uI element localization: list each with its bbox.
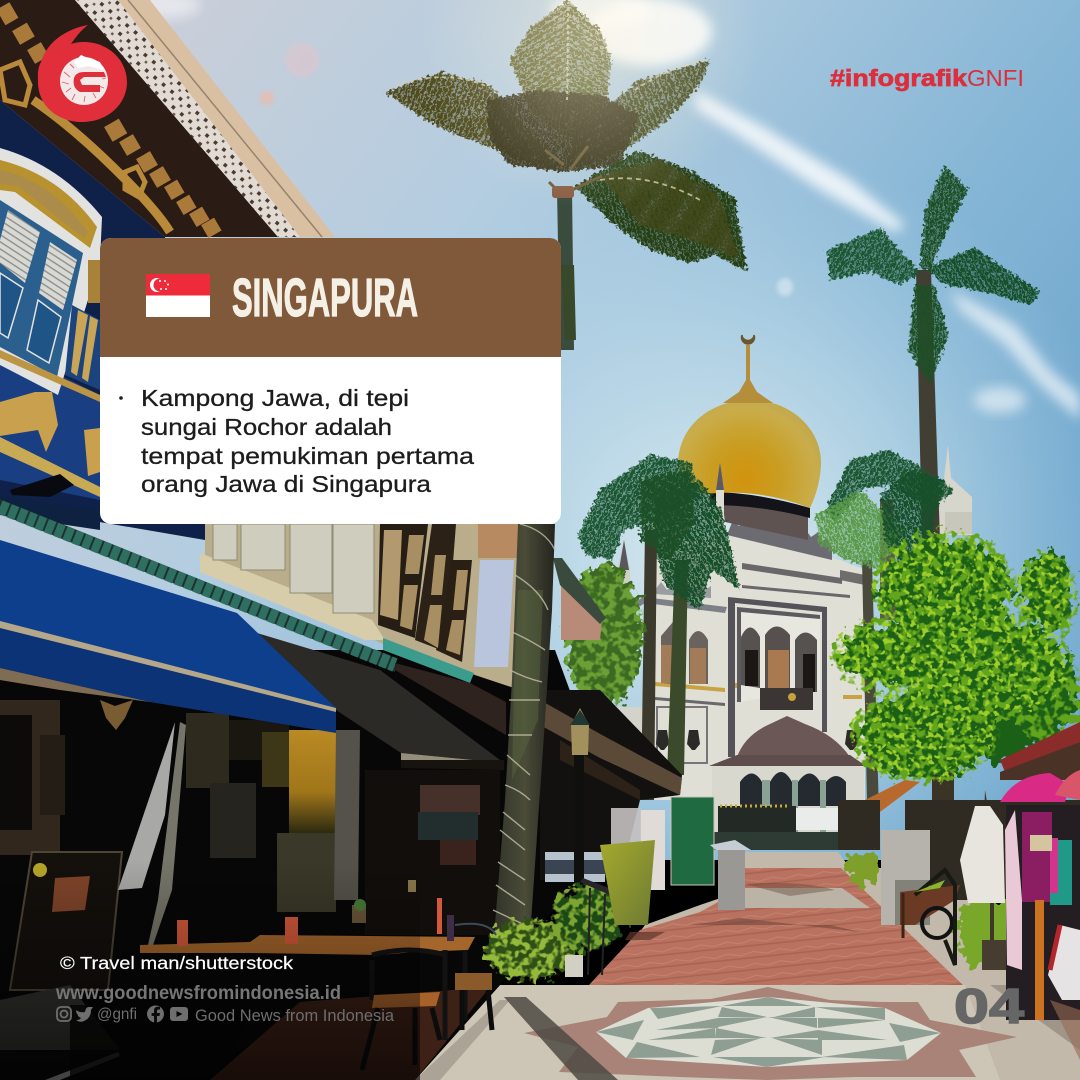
clothes rack xyxy=(1005,805,1080,1020)
social media row xyxy=(57,1006,395,1025)
page number: 04 xyxy=(954,980,1024,1034)
olive planter xyxy=(600,840,655,925)
lower vignette for caption legibility xyxy=(0,860,420,1080)
slim spire by dome xyxy=(716,462,724,535)
body text xyxy=(141,385,475,497)
body text: Kampong Jawa, di tepi xyxy=(141,385,409,411)
palm shadow on paving xyxy=(504,997,618,1080)
black awning xyxy=(257,633,504,763)
bullet xyxy=(119,396,123,400)
right shop row with awnings xyxy=(540,690,682,890)
facebook page name: Good News from Indonesia xyxy=(195,1007,395,1025)
body text: tempat pemukiman pertama xyxy=(141,443,475,469)
olive lit wall xyxy=(186,713,229,788)
website url: www.goodnewsfromindonesia.id xyxy=(55,983,341,1004)
green notice board xyxy=(671,797,714,885)
canopy roof xyxy=(737,716,850,757)
hashtag: GNFI xyxy=(967,65,1024,91)
left wing roof ornaments xyxy=(623,597,727,616)
white fretwork trim xyxy=(75,0,300,237)
gold fanlight xyxy=(0,160,97,248)
menu board xyxy=(10,852,122,990)
sky xyxy=(0,0,1080,860)
icon: Singapore flag xyxy=(146,274,210,317)
card header band xyxy=(100,238,561,357)
lower left recessed panel xyxy=(657,707,707,763)
palm pair in front of mosque and background palms xyxy=(578,450,955,850)
panel: Singapura card xyxy=(100,238,561,524)
right market stalls xyxy=(838,722,1080,1060)
carved roof eave and gutter xyxy=(0,0,335,238)
left shop frame xyxy=(0,700,60,855)
cafe tables and chairs xyxy=(0,898,496,1080)
heading: SINGAPURA xyxy=(232,268,418,328)
teal awning xyxy=(383,638,474,683)
icon: instagram xyxy=(57,1007,71,1021)
dome drum xyxy=(722,500,808,540)
steel info stand xyxy=(710,840,751,910)
blue shutters xyxy=(0,200,83,377)
bench and bicycle xyxy=(900,870,960,965)
handle: @gnfi xyxy=(97,1006,137,1023)
mosque walls xyxy=(587,535,865,800)
shop interior clothes display xyxy=(352,770,500,935)
icon: facebook xyxy=(147,1006,164,1023)
body text: sungai Rochor adalah xyxy=(141,414,392,440)
green-grey triangles xyxy=(596,997,941,1067)
blue awning xyxy=(0,540,336,733)
pink star xyxy=(524,987,1017,1080)
dome finial with crescent xyxy=(723,335,773,403)
hashtag xyxy=(830,65,1024,91)
tall palm tree, top centre xyxy=(385,0,800,350)
teal roof tiles xyxy=(0,499,395,672)
yellow hedges xyxy=(845,850,879,886)
icon: youtube xyxy=(170,1007,188,1021)
green tree behind shop roofs xyxy=(565,563,645,707)
brown louvred shutters xyxy=(378,524,472,662)
gold pilaster xyxy=(65,305,100,390)
cream gutter xyxy=(118,0,335,237)
card body xyxy=(100,238,561,524)
gold corbels xyxy=(0,2,222,238)
body text: orang Jawa di Singapura xyxy=(141,471,432,497)
blank hanging sign xyxy=(474,560,514,667)
minaret, right xyxy=(938,445,972,535)
patterned window frame xyxy=(728,597,827,757)
wall lanterns xyxy=(656,730,858,750)
arched windows xyxy=(661,607,820,702)
icon: twitter xyxy=(76,1007,93,1022)
stall shadow xyxy=(838,800,1080,900)
golden dome xyxy=(678,400,821,508)
blue arched louvred window xyxy=(0,148,102,530)
crenellated parapet xyxy=(727,519,832,560)
balcony xyxy=(760,688,813,710)
pale pillar xyxy=(277,833,336,912)
GNFI logo xyxy=(38,25,127,122)
dark wooden soffit xyxy=(0,0,278,237)
black dome band xyxy=(710,492,810,518)
plaza ground xyxy=(415,852,1080,1080)
interior panels xyxy=(229,720,289,760)
star pavement mosaic xyxy=(524,987,1017,1080)
light centre xyxy=(596,997,941,1067)
garden plants near trunk xyxy=(484,878,624,980)
brown awning xyxy=(395,663,506,735)
gold bands and swags xyxy=(0,350,100,402)
pink shophouse gable xyxy=(553,558,606,640)
roof tiles and awnings xyxy=(0,499,506,770)
blue painted facade, left edge xyxy=(0,100,205,540)
dim red bricks under tables xyxy=(210,987,490,1080)
gold garland xyxy=(33,100,170,232)
pink umbrella xyxy=(1000,773,1070,802)
upper cream shophouse with shutters xyxy=(200,524,520,690)
palm tree, far right xyxy=(827,165,1040,540)
hashtag: #infografik xyxy=(830,65,967,91)
big palm trunk with ropes xyxy=(493,524,555,937)
left street level darkness and shopfronts xyxy=(0,650,682,1080)
arcade xyxy=(708,766,864,850)
grey panel xyxy=(881,830,930,925)
wall shading xyxy=(587,707,645,800)
white arch surround xyxy=(0,148,102,395)
brick walkway xyxy=(589,868,963,985)
orange shop awning xyxy=(865,780,920,812)
white dress on mannequin xyxy=(960,806,1005,903)
big green tree, right xyxy=(832,530,1080,870)
minaret, left xyxy=(617,540,630,610)
street lamp xyxy=(570,708,590,883)
red roof xyxy=(1000,722,1080,772)
glowing yellow painting xyxy=(289,730,339,833)
photo credit: © Travel man/shutterstock xyxy=(60,953,293,973)
mosque xyxy=(587,335,972,850)
white banner xyxy=(118,722,175,890)
